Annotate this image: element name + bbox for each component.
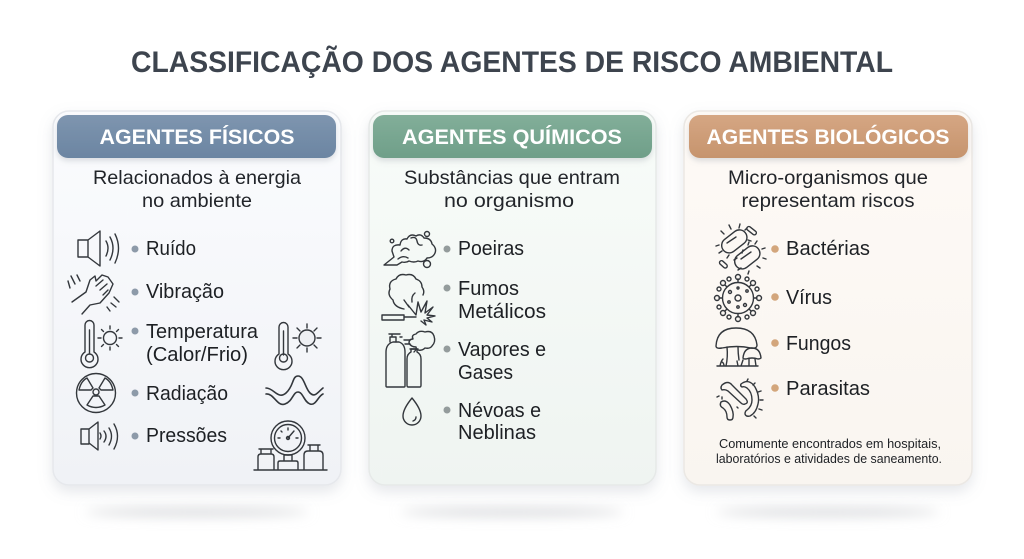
- bullet and label: Parasitas: Parasitas: [786, 378, 870, 400]
- icon: waves: [266, 376, 323, 404]
- panel header: AGENTES QUÍMICOS: [402, 124, 622, 149]
- panel: agentes físicos: [53, 111, 341, 485]
- icon: dust cloud: [384, 232, 436, 268]
- footnote: [716, 437, 942, 466]
- floor shadow: biological panel: [716, 508, 940, 516]
- bullet and label: Temperatura (Calor/Frio): [132, 321, 259, 366]
- panel background: [53, 111, 341, 485]
- bullet and label: Fumos Metálicos: Metálicos: [458, 301, 546, 323]
- icon: metal fumes: [382, 274, 435, 325]
- bullet and label: Vírus: Vírus: [786, 287, 832, 309]
- icon: pressure gauge: [254, 421, 327, 470]
- bullet and label: Ruído: Ruído: [146, 238, 196, 260]
- icon: virus: [714, 274, 762, 322]
- panel header: AGENTES FÍSICOS: [100, 124, 294, 149]
- bullet and label: Névoas e Neblinas: Neblinas: [458, 422, 536, 444]
- icon: thermometer and sun right: [275, 322, 321, 370]
- footnote: Comumente encontrados em hospitais,: [719, 437, 941, 451]
- subtitle: no ambiente: [142, 190, 252, 212]
- bullet and label: Vapores e Gases: [444, 339, 546, 384]
- icon: speaker pressure: [81, 422, 118, 450]
- subtitle: [728, 167, 928, 212]
- icon: radiation: [76, 374, 116, 412]
- bullet and label: Vapores e Gases: Gases: [458, 362, 513, 384]
- panel header: [373, 115, 652, 158]
- subtitle: Micro-organismos que: [728, 167, 928, 189]
- icon: bacteria: [716, 224, 766, 274]
- icon: vibrating hands: [68, 275, 119, 314]
- bullet and label: Vapores e Gases: Vapores e: [458, 339, 546, 361]
- floor shadow: physical panel: [85, 508, 309, 516]
- panel: agentes químicos: [369, 111, 656, 485]
- bullet and label: Fungos: Fungos: [786, 333, 851, 355]
- icon: thermometer and sun: [81, 320, 122, 368]
- panel header: AGENTES BIOLÓGICOS: [706, 124, 950, 149]
- subtitle: Substâncias que entram: [404, 167, 620, 189]
- icon: parasites: [717, 379, 763, 420]
- bullet and label: Fumos Metálicos: [444, 278, 546, 323]
- panel background: [369, 111, 656, 485]
- subtitle: no organismo: [444, 190, 574, 212]
- bullet and label: Pressões: Pressões: [146, 425, 227, 447]
- bullet and label: Radiação: Radiação: [146, 383, 228, 405]
- title: CLASSIFICAÇÃO DOS AGENTES DE RISCO AMBIENTAL: [131, 45, 893, 79]
- panel header: [689, 115, 968, 158]
- floor shadow: chemical panel: [400, 508, 624, 516]
- bullet and label: Fumos Metálicos: Fumos: [458, 278, 519, 300]
- subtitle: [93, 167, 301, 212]
- bullet and label: Vibração: Vibração: [146, 281, 224, 303]
- bullet and label: Névoas e Neblinas: Névoas e: [458, 400, 541, 422]
- icon: mushrooms: [716, 328, 761, 366]
- bullet and label: Bactérias: Bactérias: [786, 238, 870, 260]
- subtitle: [404, 167, 620, 212]
- panel: agentes biológicos: [684, 111, 972, 485]
- bullet and label: Temperatura (Calor/Frio): (Calor/Frio): [146, 344, 248, 366]
- icon: speaker noise: [78, 231, 118, 266]
- bullet and label: Temperatura (Calor/Frio): Temperatura: [146, 321, 259, 343]
- bullet and label: Névoas e Neblinas: [444, 400, 541, 444]
- panel header: [57, 115, 336, 158]
- subtitle: Relacionados à energia: [93, 167, 301, 189]
- subtitle: representam riscos: [742, 190, 915, 212]
- icon: droplet: [403, 398, 421, 425]
- footnote: laboratórios e atividades de saneamento.: [716, 452, 942, 466]
- icon: gas cylinders: [386, 331, 435, 387]
- panel background: [684, 111, 972, 485]
- bullet and label: Poeiras: Poeiras: [458, 238, 524, 260]
